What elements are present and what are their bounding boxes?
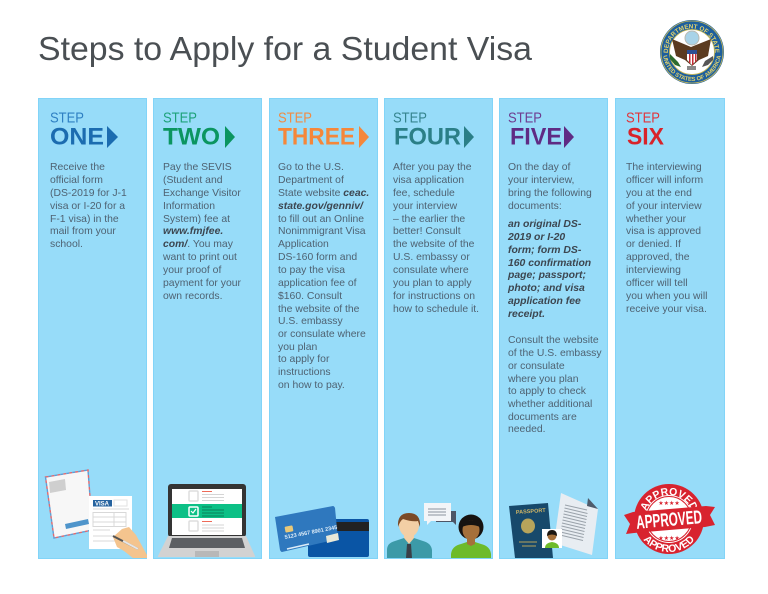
icon: approved stamp: APPROVED [635,507,703,534]
text: step five body: your interview, [508,175,574,186]
heading: step four: STEP [393,110,427,126]
text: step six body: interviewing [626,265,681,276]
text: step five body: form; form DS- [508,245,582,256]
text: step two body: Exchange Visitor [163,188,241,199]
text: step four body: – the earlier the [393,214,465,225]
text: step four body: consulate where [393,265,469,276]
text: step three body: Department of [278,175,344,186]
text: step one body: mail from your [50,226,116,237]
icon: two people talking [387,503,491,558]
text: step one body: F-1 visa) in the [50,214,119,225]
icon: passport and document [509,493,598,558]
heading: step three: STEP [278,110,312,126]
text: step three body: Go to the U.S. [278,162,344,173]
text: step three body: to pay the visa [278,265,345,276]
text: step three body [278,162,369,391]
text: step three body: State website ceac. [278,188,369,199]
text: step six body: receive your visa. [626,304,707,315]
text: step five body: of the U.S. embassy [508,348,602,359]
text: step two body: want to print out [162,252,237,263]
text: step five body: On the day of [508,162,570,173]
panel: step five [500,98,608,558]
heading: step five: FIVE [510,124,562,150]
heading: step six: STEP [626,110,660,126]
text: step four body: fee, schedule [393,188,455,199]
heading: step two: STEP [163,110,197,126]
text: step three body: instructions [278,367,331,378]
text: step five body: 2019 or I-20 [507,232,565,243]
icon: credit cards: 5123 4567 8901 2345 [284,525,338,541]
text: step five body: documents are [508,412,577,423]
text: step four body: the website of the [393,239,475,250]
panel: step four [384,98,492,558]
text: step five body [507,162,602,435]
text: step five body: photo; and visa [507,283,585,294]
text: step one body: (DS-2019 for J-1 [50,188,127,199]
text: step four body: for instructions on [393,291,475,302]
text: step one body: Receive the [50,162,105,173]
heading: step one [50,110,118,150]
text: step six body: of your interview [626,201,702,212]
text: step two body: Information [163,201,215,212]
text: step four body: how to schedule it. [393,304,479,315]
icon: credit cards [275,506,369,557]
text: step three body: application fee of [278,278,357,289]
text: step two body: payment for your [163,278,242,289]
heading: step one: STEP [50,110,84,126]
text: step five body: whether additional [507,399,592,410]
icon: passport and document: PASSPORT [516,508,547,516]
text: step three body: state.gov/genniv/ [278,201,364,212]
icon: approved stamp [624,484,715,554]
heading: step two: TWO [163,124,220,150]
text: step one body: official form [50,175,103,186]
text: step four body: better! Consult [393,226,461,237]
icon: Department of State seal [660,20,724,84]
text: step five body: or consulate [508,361,565,372]
icon: envelope and visa form [46,470,147,558]
text: step five body: bring the following [508,188,592,199]
text: step four body [393,162,479,315]
text: step three body: on how to pay. [278,380,345,391]
panel: step three [270,98,378,558]
text: step two body: Pay the SEVIS [163,162,232,173]
heading: step two [163,110,235,150]
heading: step four: FOUR [394,124,461,150]
icon: Department of State seal: DEPARTMENT OF STATE [664,24,720,53]
text: step two body: (Student and [163,175,223,186]
text: step three body: Nonimmigrant Visa [278,226,366,237]
text: step five body: an original DS- [508,219,582,230]
text: step five body: needed. [508,424,546,435]
text: step three body: to apply for [278,354,330,365]
text: step three body: the website of the [278,304,360,315]
panel: step two [154,98,262,558]
heading: step one: ONE [50,124,104,150]
icon: approved stamp: APPROVED [641,488,697,511]
text: step six body: or denied. If [626,239,681,250]
text: step six body [625,162,707,315]
panel: step six [615,98,725,559]
text: step three body: DS-160 form and [278,252,357,263]
heading: step six [626,110,664,150]
text: step two body: System) fee at [163,214,230,225]
icon: approved stamp: ★★★★ [658,500,680,507]
text: step three body: Application [278,239,329,250]
text: step six body: The interviewing [626,162,702,173]
heading: step five [508,110,574,150]
text: step five body: where you plan [507,374,579,385]
text: step five body: documents: [508,201,562,212]
text: step five body: to apply to check [508,386,587,397]
text: step three body: U.S. embassy [278,316,343,327]
text: step five body: application fee [508,296,581,307]
text: step five body: Consult the website [508,335,599,346]
icon: envelope and visa form: VISA [95,502,110,508]
icon: approved stamp: ★★★★ [658,535,680,542]
text: step one body: visa or I-20 for a [50,201,125,212]
text: step three body: to fill out an Online [278,214,364,225]
text: step six body: you at the end [626,188,692,199]
text: step two body: www.fmjfee. [163,226,223,237]
heading: step five: STEP [508,110,542,126]
text: step three body: $160. Consult [278,291,342,302]
text: step six body: visa is approved [626,226,701,237]
text: step one body [50,162,127,250]
text: step two body: your proof of [163,265,221,276]
heading: step three [278,110,369,150]
icon: laptop with checklist [158,484,255,557]
text: step six body: officer will tell [626,278,688,289]
text: step four body: your interview [393,201,458,212]
text: step six body: officer will inform [626,175,703,186]
text: step two body: own records. [163,291,222,302]
text: step four body: After you pay the [393,162,472,173]
text: step five body: page; passport; [507,270,586,281]
heading: step three: THREE [278,124,355,150]
text: step three body: or consulate where [278,329,366,340]
text: step six body: whether your [625,214,687,225]
text: step three body: you plan [278,342,318,353]
heading: step four [393,110,474,150]
text: step four body: visa application [393,175,464,186]
text: step six body: approved, the [626,252,690,263]
text: step four body: you plan to apply [393,278,472,289]
text: step two body: com/. You may [163,239,234,250]
text: step one body: school. [50,239,83,250]
text: step two body [162,162,242,302]
text: step five body: receipt. [508,309,545,320]
icon: approved stamp: APPROVED [643,536,694,552]
text: step five body: 160 confirmation [508,258,591,269]
icon: Department of State seal: UNITED STATES OF AMERICA [663,55,721,81]
text: step six body: you when you will [626,291,707,302]
heading: step six: SIX [627,124,664,150]
title: Steps to Apply for a Student Visa [38,31,532,68]
panel: step one [38,98,147,558]
text: step four body: U.S. embassy or [393,252,470,263]
